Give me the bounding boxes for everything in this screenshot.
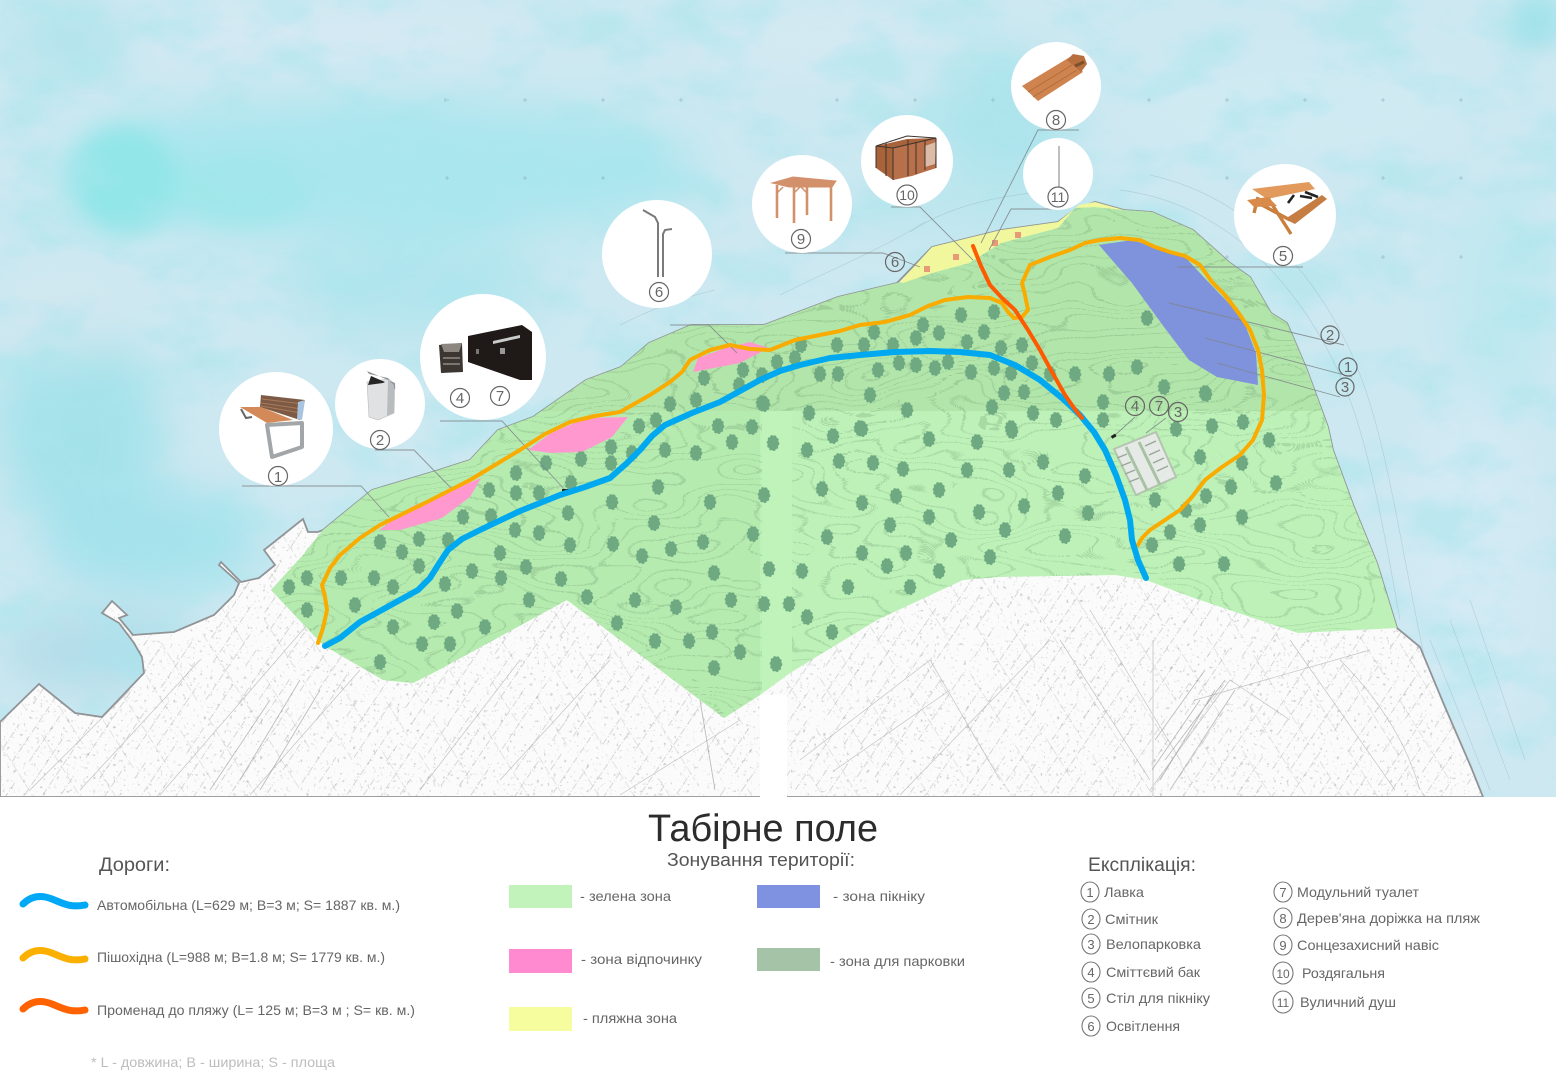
icon: waste container bbox=[439, 343, 463, 373]
small equipment markers bbox=[562, 434, 1117, 492]
callout 2: bin bbox=[335, 359, 425, 450]
icon: changing cabins bbox=[876, 136, 936, 180]
icon: modular toilet bbox=[468, 325, 532, 380]
item 2: Смітник bbox=[1105, 911, 1159, 927]
panel: explication list bbox=[1081, 855, 1481, 1036]
road: promenade to beach bbox=[973, 246, 1082, 418]
swatch: pedestrian road bbox=[23, 950, 85, 960]
panel: roads legend bbox=[23, 855, 415, 1070]
icon: roll walkway bbox=[1022, 54, 1087, 101]
footnote: * L - довжина; B - ширина; S - площа bbox=[91, 1054, 335, 1070]
parking area bbox=[1114, 432, 1176, 495]
label: promenade: Променад до пляжу (L= 125 м; B=3 м ; S= кв. м.) bbox=[97, 1002, 415, 1018]
item 8 bbox=[1274, 908, 1481, 928]
item 3: 3 bbox=[1087, 937, 1095, 952]
item 5: Стіл для пікніку bbox=[1106, 990, 1210, 1006]
road: pedestrian bbox=[318, 238, 1264, 643]
map number markers bbox=[886, 252, 1357, 422]
heading: zoning: Зонування території: bbox=[667, 850, 855, 870]
beach zone bbox=[900, 202, 1124, 283]
callout 9: sun canopy bbox=[752, 155, 852, 253]
item 7: Модульний туалет bbox=[1297, 884, 1420, 900]
item 2 bbox=[1082, 909, 1159, 929]
callout 1: bench: 1 bbox=[274, 469, 282, 486]
item 7: 7 bbox=[1279, 885, 1287, 900]
callout 1: bench bbox=[219, 372, 333, 486]
map number markers: 3 bbox=[1174, 404, 1182, 421]
heading: roads: Дороги: bbox=[99, 855, 170, 876]
swatch: green zone bbox=[509, 885, 572, 908]
item 9: 9 bbox=[1279, 938, 1287, 953]
item 4: 4 bbox=[1087, 965, 1095, 980]
item 8: Дерев'яна доріжка на пляж bbox=[1297, 910, 1481, 926]
swatch: promenade bbox=[23, 1001, 85, 1011]
label: green zone: - зелена зона bbox=[580, 888, 671, 904]
callout 4, 7: waste container and modular toilet bbox=[420, 294, 546, 420]
item 5: 5 bbox=[1087, 991, 1095, 1006]
map number markers: 3 bbox=[1341, 379, 1349, 396]
beach furniture dots bbox=[924, 232, 1021, 272]
callout 8: wooden walkway bbox=[1011, 42, 1101, 130]
swatch: picnic zone bbox=[757, 885, 820, 908]
map number markers: 6 bbox=[891, 254, 899, 271]
callout 2: bin: 2 bbox=[376, 432, 384, 449]
callout 11: street shower bbox=[1023, 138, 1093, 210]
callout 5: picnic table: 5 bbox=[1279, 248, 1287, 265]
item 5 bbox=[1082, 988, 1210, 1008]
drawing grid crosses bbox=[445, 98, 1463, 259]
label: automobile road: Автомобільна (L=629 м; B=3 м; S= 1887 кв. м.) bbox=[97, 897, 400, 913]
callout 8: wooden walkway: 8 bbox=[1052, 112, 1060, 129]
white legend panel bbox=[0, 797, 1556, 1092]
icon: bin bbox=[367, 371, 395, 420]
item 10: Роздягальня bbox=[1302, 965, 1385, 981]
swatch: automobile road bbox=[23, 896, 85, 906]
land base map bbox=[0, 202, 1556, 797]
picnic zone bbox=[1099, 240, 1258, 385]
item 4: Сміттєвий бак bbox=[1106, 964, 1201, 980]
icon: bench bbox=[240, 395, 305, 457]
item 2: 2 bbox=[1087, 912, 1095, 927]
road: automobile bbox=[325, 351, 1146, 646]
item 1: Лавка bbox=[1104, 884, 1144, 900]
callout 10: changing room: 10 bbox=[899, 187, 915, 203]
item 9: Сонцезахисний навіс bbox=[1297, 937, 1439, 953]
callout 4, 7: waste container and modular toilet: 4 bbox=[456, 390, 464, 407]
item 1: 1 bbox=[1086, 885, 1094, 900]
title: Табірне поле bbox=[648, 808, 878, 850]
callout 5: picnic table bbox=[1234, 164, 1336, 266]
icon: street lamps bbox=[643, 210, 672, 277]
item 6: 6 bbox=[1087, 1019, 1095, 1034]
map number markers: 1 bbox=[1344, 359, 1352, 376]
swatch: rest zone bbox=[509, 949, 572, 973]
swatch: parking zone bbox=[757, 948, 820, 971]
map number markers: 7 bbox=[1155, 398, 1163, 415]
panel: zoning legend bbox=[509, 850, 965, 1031]
label: pedestrian road: Пішохідна (L=988 м; B=1.8 м; S= 1779 кв. м.) bbox=[97, 949, 385, 965]
label: parking zone: - зона для парковки bbox=[830, 953, 965, 969]
map number markers: 2 bbox=[1326, 327, 1334, 344]
trees bbox=[283, 305, 1282, 675]
item 3: Велопарковка bbox=[1106, 936, 1201, 952]
item 6 bbox=[1082, 1016, 1180, 1036]
green zone bbox=[250, 190, 1410, 731]
item 4 bbox=[1082, 962, 1201, 982]
water background bbox=[0, 0, 1556, 800]
icon: shower pole bbox=[1058, 146, 1060, 187]
item 3 bbox=[1082, 934, 1201, 954]
item 9 bbox=[1274, 935, 1439, 955]
callout 10: changing room bbox=[861, 115, 953, 207]
map number markers: 4 bbox=[1131, 398, 1139, 415]
icon: picnic table bbox=[1247, 182, 1327, 234]
item 11: 11 bbox=[1277, 996, 1290, 1010]
leader lines bbox=[242, 130, 1352, 517]
item 10 bbox=[1273, 962, 1385, 984]
icon: pergola bbox=[772, 177, 836, 223]
item 11 bbox=[1273, 991, 1396, 1013]
item 6: Освітлення bbox=[1106, 1018, 1180, 1034]
callout 11: street shower: 11 bbox=[1051, 189, 1065, 205]
item 8: 8 bbox=[1279, 911, 1287, 926]
label: rest zone: - зона відпочинку bbox=[581, 951, 702, 967]
callout 6: lighting: 6 bbox=[655, 284, 663, 301]
item 1 bbox=[1081, 882, 1144, 902]
rest zones bbox=[379, 342, 769, 530]
item 11: Вуличний душ bbox=[1300, 994, 1396, 1010]
swatch: beach zone bbox=[509, 1007, 572, 1031]
callout 9: sun canopy: 9 bbox=[797, 231, 805, 248]
item 10: 10 bbox=[1276, 967, 1290, 981]
callout 6: lighting bbox=[602, 200, 712, 308]
heading: explication: Експлікація: bbox=[1088, 855, 1196, 876]
sea contour lines near coast bbox=[620, 175, 1525, 790]
label: picnic zone: - зона пікніку bbox=[833, 888, 925, 904]
item 7 bbox=[1274, 882, 1420, 902]
callout 4, 7: waste container and modular toilet: 7 bbox=[496, 388, 504, 405]
label: beach zone: - пляжна зона bbox=[583, 1010, 677, 1026]
